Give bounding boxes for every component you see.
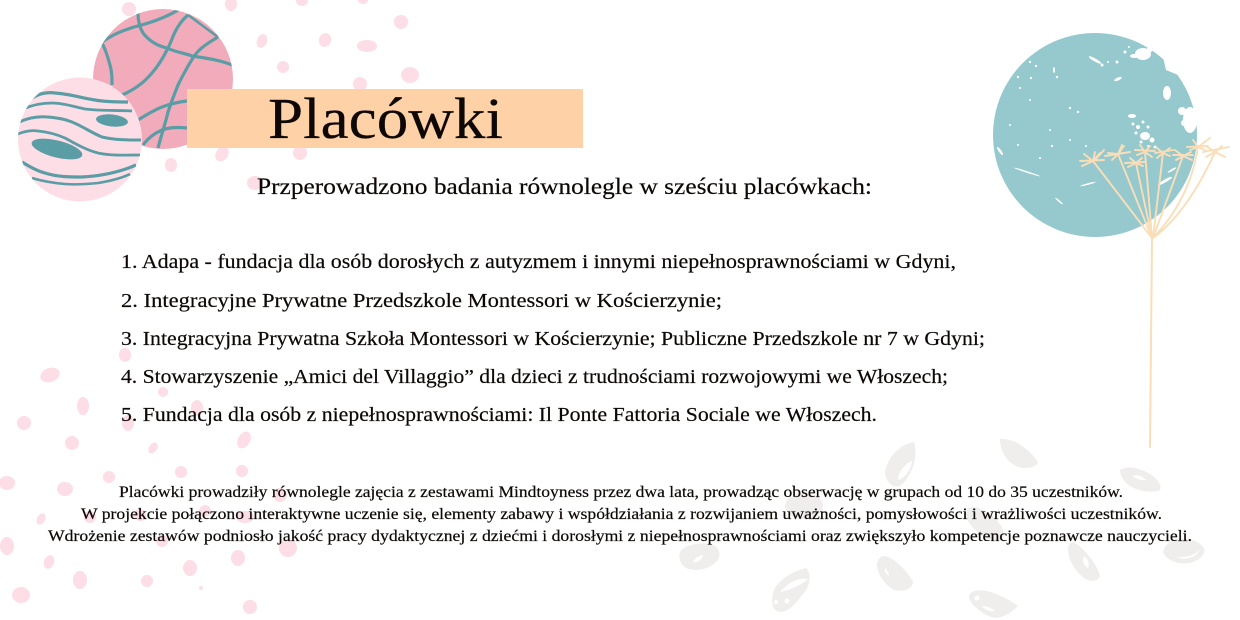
icon: pink planet [93, 9, 233, 149]
background: grey seeds [679, 439, 1204, 618]
numbered list of facilities: 2. Integracyjne Prywatne Przedszkole Montessori w Kościerzynie; [121, 290, 722, 312]
background: pink petals [0, 0, 419, 614]
closing paragraph: Placówki prowadziły równolegle zajęcia z zestawami Mindtoyness przez dwa lata, prowadząc obserwację w grupach od 10 do 35 uczestników. [119, 484, 1123, 501]
closing paragraph: W projekcie połączono interaktywne uczenie się, elementy zabawy i współdziałania z rozwijaniem uważności, pomysłowości i wrażliwości uczestników. [81, 506, 1162, 523]
icon: teal textured circle [993, 33, 1205, 237]
title: Placówki [268, 86, 503, 151]
icon: light pink planet [18, 78, 142, 202]
numbered list of facilities: 4. Stowarzyszenie „Amici del Villaggio” dla dzieci z trudnościami rozwojowymi we Włoszech; [121, 366, 948, 388]
numbered list of facilities: 3. Integracyjna Prywatna Szkoła Montessori w Kościerzynie; Publiczne Przedszkole nr 7 w Gdyni; [121, 328, 985, 350]
closing paragraph [48, 484, 1192, 545]
icon: umbel plant [1080, 138, 1229, 447]
numbered list of facilities [121, 251, 985, 426]
closing paragraph: Wdrożenie zestawów podniosło jakość pracy dydaktycznej z dziećmi i dorosłymi z niepełnosprawnościami oraz zwiększyło kompetencje poznawcze nauczycieli. [48, 528, 1192, 545]
subtitle: Przperowadzono badania równolegle w sześciu placówkach: [257, 174, 872, 200]
numbered list of facilities: 1. Adapa - fundacja dla osób dorosłych z autyzmem i innymi niepełnosprawnościami w Gdyni, [121, 251, 956, 273]
title banner [187, 86, 583, 151]
numbered list of facilities: 5. Fundacja dla osób z niepełnosprawnościami: Il Ponte Fattoria Sociale we Włoszech. [121, 404, 877, 426]
